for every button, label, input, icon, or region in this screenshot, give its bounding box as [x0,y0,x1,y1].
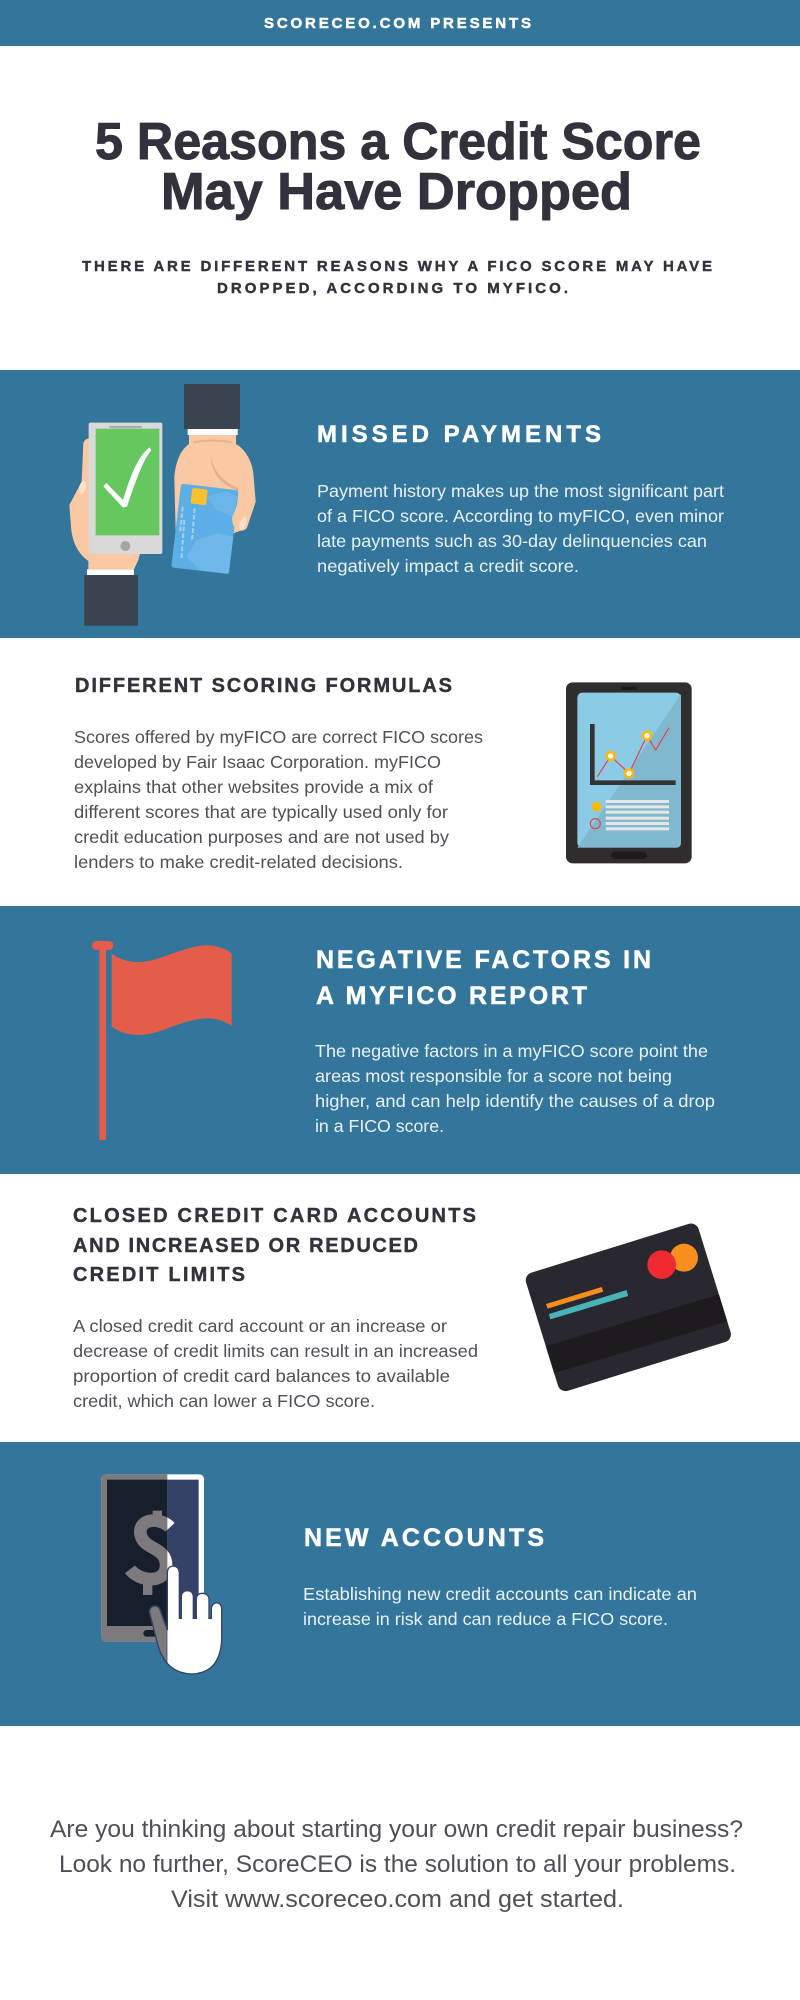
panel: negative factors [0,906,800,1174]
text block: new accounts [303,1584,697,1629]
title: 5 Reasons a Credit Score [95,113,701,171]
text block: closed credit card accounts: proportion of credit card balances to available [73,1366,450,1386]
text block: different scoring formulas: different scores that are typically used only for [74,802,448,822]
panel: new accounts [0,1442,800,1726]
text block: different scoring formulas: developed by Fair Isaac Corporation. myFICO [74,752,441,772]
text block: missed payments: late payments such as 30-day delinquencies can [317,531,707,551]
heading: negative factors: NEGATIVE FACTORS IN [316,946,651,974]
text block: missed payments: of a FICO score. According to myFICO, even minor [317,506,724,526]
title: May Have Dropped [161,163,632,221]
header banner [0,0,800,46]
closing call to action: Visit www.scoreceo.com and get started. [171,1886,624,1913]
text block: negative factors: higher, and can help identify the causes of a drop [315,1091,715,1111]
header banner: SCORECEO.COM PRESENTS [264,15,531,32]
text block: new accounts: increase in risk and can reduce a FICO score. [303,1609,668,1629]
title [95,113,701,221]
heading: negative factors: A MYFICO REPORT [316,982,587,1010]
heading: missed payments: MISSED PAYMENTS [317,421,601,448]
icon: dark credit card [524,1222,733,1393]
text block: negative factors: areas most responsible for a score not being [315,1066,672,1086]
panel: closed credit card accounts [73,1205,733,1411]
heading: closed credit card accounts: AND INCREASED OR REDUCED [73,1235,418,1257]
closing call to action: Look no further, ScoreCEO is the solution to all your problems. [59,1851,736,1878]
heading: closed credit card accounts [73,1205,476,1286]
heading: different scoring formulas: DIFFERENT SCORING FORMULAS [75,675,452,697]
text block: negative factors: in a FICO score. [315,1116,444,1136]
subtitle: THERE ARE DIFFERENT REASONS WHY A FICO SCORE MAY HAVE [82,258,712,275]
icon: red flag [92,941,232,1140]
closing call to action: Are you thinking about starting your own credit repair business? [50,1816,743,1843]
text block: closed credit card accounts [73,1316,478,1411]
text block: different scoring formulas: lenders to make credit-related decisions. [74,852,403,872]
text block: different scoring formulas: credit education purposes and are not used by [74,827,449,847]
text block: different scoring formulas: Scores offered by myFICO are correct FICO scores [74,727,483,747]
text block: different scoring formulas: explains that other websites provide a mix of [74,777,433,797]
subtitle [82,258,712,297]
heading: negative factors [316,946,651,1010]
text block: missed payments: negatively impact a credit score. [317,556,579,576]
heading: closed credit card accounts: CREDIT LIMITS [73,1264,245,1286]
text block: closed credit card accounts: credit, which can lower a FICO score. [73,1391,375,1411]
icon: phone with dollar sign and hand [101,1474,222,1674]
heading: new accounts: NEW ACCOUNTS [304,1524,544,1552]
closing call to action [50,1816,743,1913]
text block: negative factors [315,1041,715,1136]
heading: closed credit card accounts: CLOSED CREDIT CARD ACCOUNTS [73,1205,476,1227]
panel: different scoring formulas [74,675,692,872]
text block: closed credit card accounts: decrease of credit limits can result in an increased [73,1341,478,1361]
panel: missed payments [0,370,800,638]
text block: different scoring formulas [74,727,483,872]
subtitle: DROPPED, ACCORDING TO MYFICO. [217,280,568,297]
text block: new accounts: Establishing new credit accounts can indicate an [303,1584,697,1604]
text block: missed payments [317,481,724,576]
text block: missed payments: Payment history makes up the most significant part [317,481,724,501]
text block: closed credit card accounts: A closed credit card account or an increase or [73,1316,447,1336]
icon: tablet with chart [566,682,692,863]
text block: negative factors: The negative factors in a myFICO score point the [315,1041,708,1061]
icon: hands with phone and credit card [69,384,256,626]
